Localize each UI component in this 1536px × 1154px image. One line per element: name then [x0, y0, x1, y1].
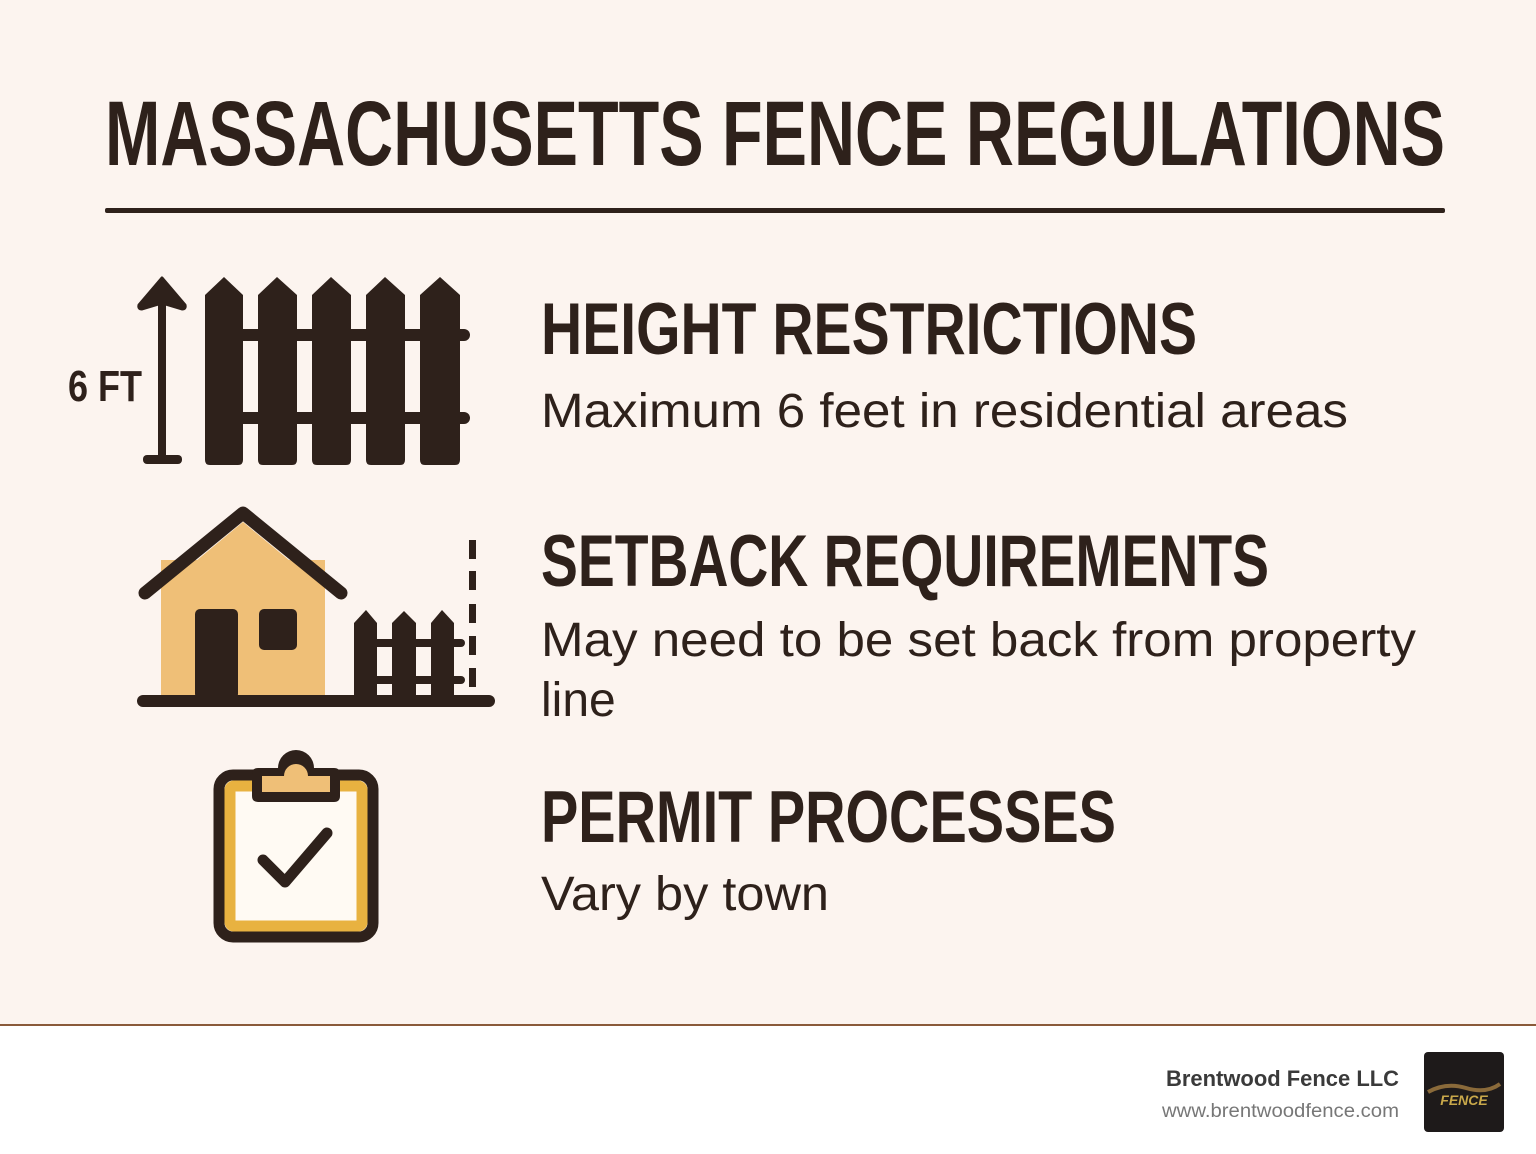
text: setback detail: line [541, 674, 616, 727]
icon: house with fence and property line [137, 513, 495, 707]
logo [1424, 1052, 1504, 1132]
footer company name: Brentwood Fence LLC [1166, 1066, 1399, 1091]
icon: fence with height arrow [68, 277, 470, 465]
icon: clipboard with check [219, 750, 373, 937]
label: 6 FT: 6 FT [68, 362, 142, 411]
text: permit detail: Vary by town [541, 868, 829, 921]
heading: setback requirements: SETBACK REQUIREMENTS [541, 521, 1269, 602]
footer [0, 1024, 1536, 1154]
text: height detail: Maximum 6 feet in residential areas [541, 385, 1348, 438]
heading: permit processes: PERMIT PROCESSES [541, 777, 1116, 858]
footer url: www.brentwoodfence.com [1161, 1101, 1399, 1122]
logo: FENCE [1440, 1092, 1488, 1108]
heading: height restrictions: HEIGHT RESTRICTIONS [541, 289, 1197, 370]
text: setback detail [541, 614, 1416, 727]
text: setback detail: May need to be set back from property [541, 614, 1416, 667]
